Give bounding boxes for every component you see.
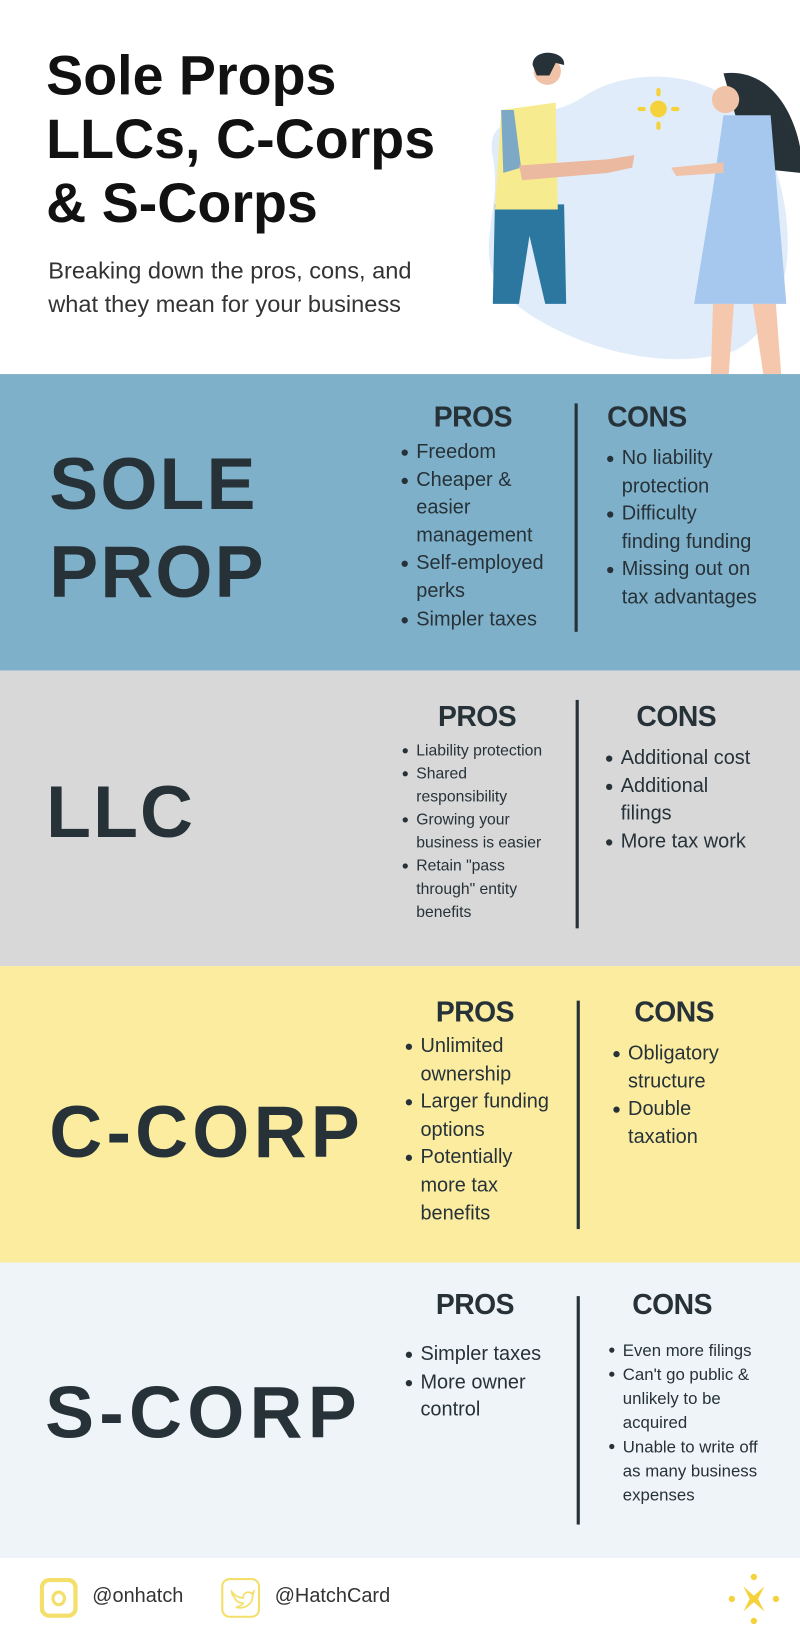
cons list <box>613 1043 719 1148</box>
footer <box>0 1558 800 1643</box>
instagram handle: @onhatch <box>92 1585 183 1607</box>
pros list: ownership <box>420 1063 511 1085</box>
pros list: Liability protection <box>416 742 542 760</box>
cons list: Can't go public & <box>623 1366 749 1384</box>
label: LLC <box>46 771 195 853</box>
pros list: Larger funding <box>420 1091 549 1113</box>
cons list <box>607 447 757 609</box>
title: LLCs, C-Corps <box>46 109 435 171</box>
subtitle: what they mean for your business <box>48 291 401 317</box>
pros list: management <box>416 525 533 547</box>
pros list: Shared <box>416 765 467 783</box>
cons list: Additional cost <box>621 747 750 769</box>
cons list: unlikely to be <box>623 1390 721 1408</box>
cons list: Missing out on <box>622 559 750 581</box>
cons list: Unable to write off <box>623 1439 758 1456</box>
cons heading: CONS <box>607 401 687 433</box>
pros heading: PROS <box>434 401 512 433</box>
pros list: responsibility <box>416 788 507 806</box>
label: S-CORP <box>45 1372 362 1453</box>
cons heading: CONS <box>636 701 716 732</box>
panel: sole prop <box>0 374 800 671</box>
cons list: finding funding <box>622 531 751 553</box>
pros list <box>406 1035 549 1224</box>
pros list: options <box>420 1119 485 1141</box>
pros list: through" entity <box>416 880 517 898</box>
icon: twitter <box>221 1578 260 1618</box>
cons list: as many business <box>623 1463 757 1481</box>
pros list <box>406 1343 541 1421</box>
label: SOLE <box>49 443 258 525</box>
pros list: benefits <box>416 903 471 921</box>
panel: LLC <box>0 671 800 966</box>
cons list: acquired <box>623 1415 687 1432</box>
pros list: Simpler taxes <box>420 1343 541 1365</box>
cons list <box>609 1342 758 1505</box>
pros list: Potentially <box>420 1147 512 1169</box>
pros list: Self-employed <box>416 553 544 575</box>
pros list: Retain "pass <box>416 857 505 875</box>
cons list: Obligatory <box>628 1043 719 1065</box>
pros list: control <box>420 1399 480 1421</box>
title: & S-Corps <box>46 173 318 235</box>
pros heading: PROS <box>436 996 514 1028</box>
cons list: taxation <box>628 1126 698 1148</box>
cons list: expenses <box>623 1487 695 1505</box>
cons list: No liability <box>622 447 713 469</box>
pros list: benefits <box>420 1202 490 1224</box>
title: Sole Props <box>46 45 336 107</box>
label: PROP <box>49 531 266 613</box>
title <box>46 45 564 235</box>
pros heading: PROS <box>438 701 516 732</box>
cons list: Even more filings <box>623 1342 751 1360</box>
pros list: Freedom <box>416 441 496 463</box>
cons heading: CONS <box>632 1289 712 1320</box>
pros list: Unlimited <box>420 1035 503 1057</box>
cons list: More tax work <box>621 831 746 853</box>
cons list: filings <box>621 803 672 825</box>
pros list: Growing your <box>416 811 510 829</box>
cons heading: CONS <box>634 996 714 1028</box>
subtitle <box>48 258 412 317</box>
pros heading: PROS <box>436 1289 514 1320</box>
subtitle: Breaking down the pros, cons, and <box>48 258 412 284</box>
cons list: tax advantages <box>622 587 757 609</box>
pros list: Cheaper & <box>416 469 512 491</box>
pros list: business is easier <box>416 834 541 852</box>
icon: sun logo <box>728 1574 779 1624</box>
pros list <box>402 742 542 921</box>
panel: C-corp <box>0 966 800 1263</box>
cons list: structure <box>628 1070 706 1092</box>
icon: instagram <box>40 1578 78 1618</box>
label: C-CORP <box>49 1091 364 1172</box>
twitter handle: @HatchCard <box>275 1585 390 1607</box>
pros list: More owner <box>420 1371 526 1393</box>
cons list: Double <box>628 1098 691 1120</box>
label <box>49 443 266 613</box>
pros list: easier <box>416 497 471 519</box>
panel: S-corp <box>0 1263 800 1558</box>
pros list <box>402 441 544 630</box>
pros list: more tax <box>420 1175 498 1197</box>
header illustration <box>489 52 800 374</box>
cons list: protection <box>622 475 709 497</box>
pros list: Simpler taxes <box>416 608 537 630</box>
cons list: Additional <box>621 775 708 797</box>
pros list: perks <box>416 580 465 602</box>
cons list: Difficulty <box>622 503 697 525</box>
cons list <box>606 747 750 853</box>
